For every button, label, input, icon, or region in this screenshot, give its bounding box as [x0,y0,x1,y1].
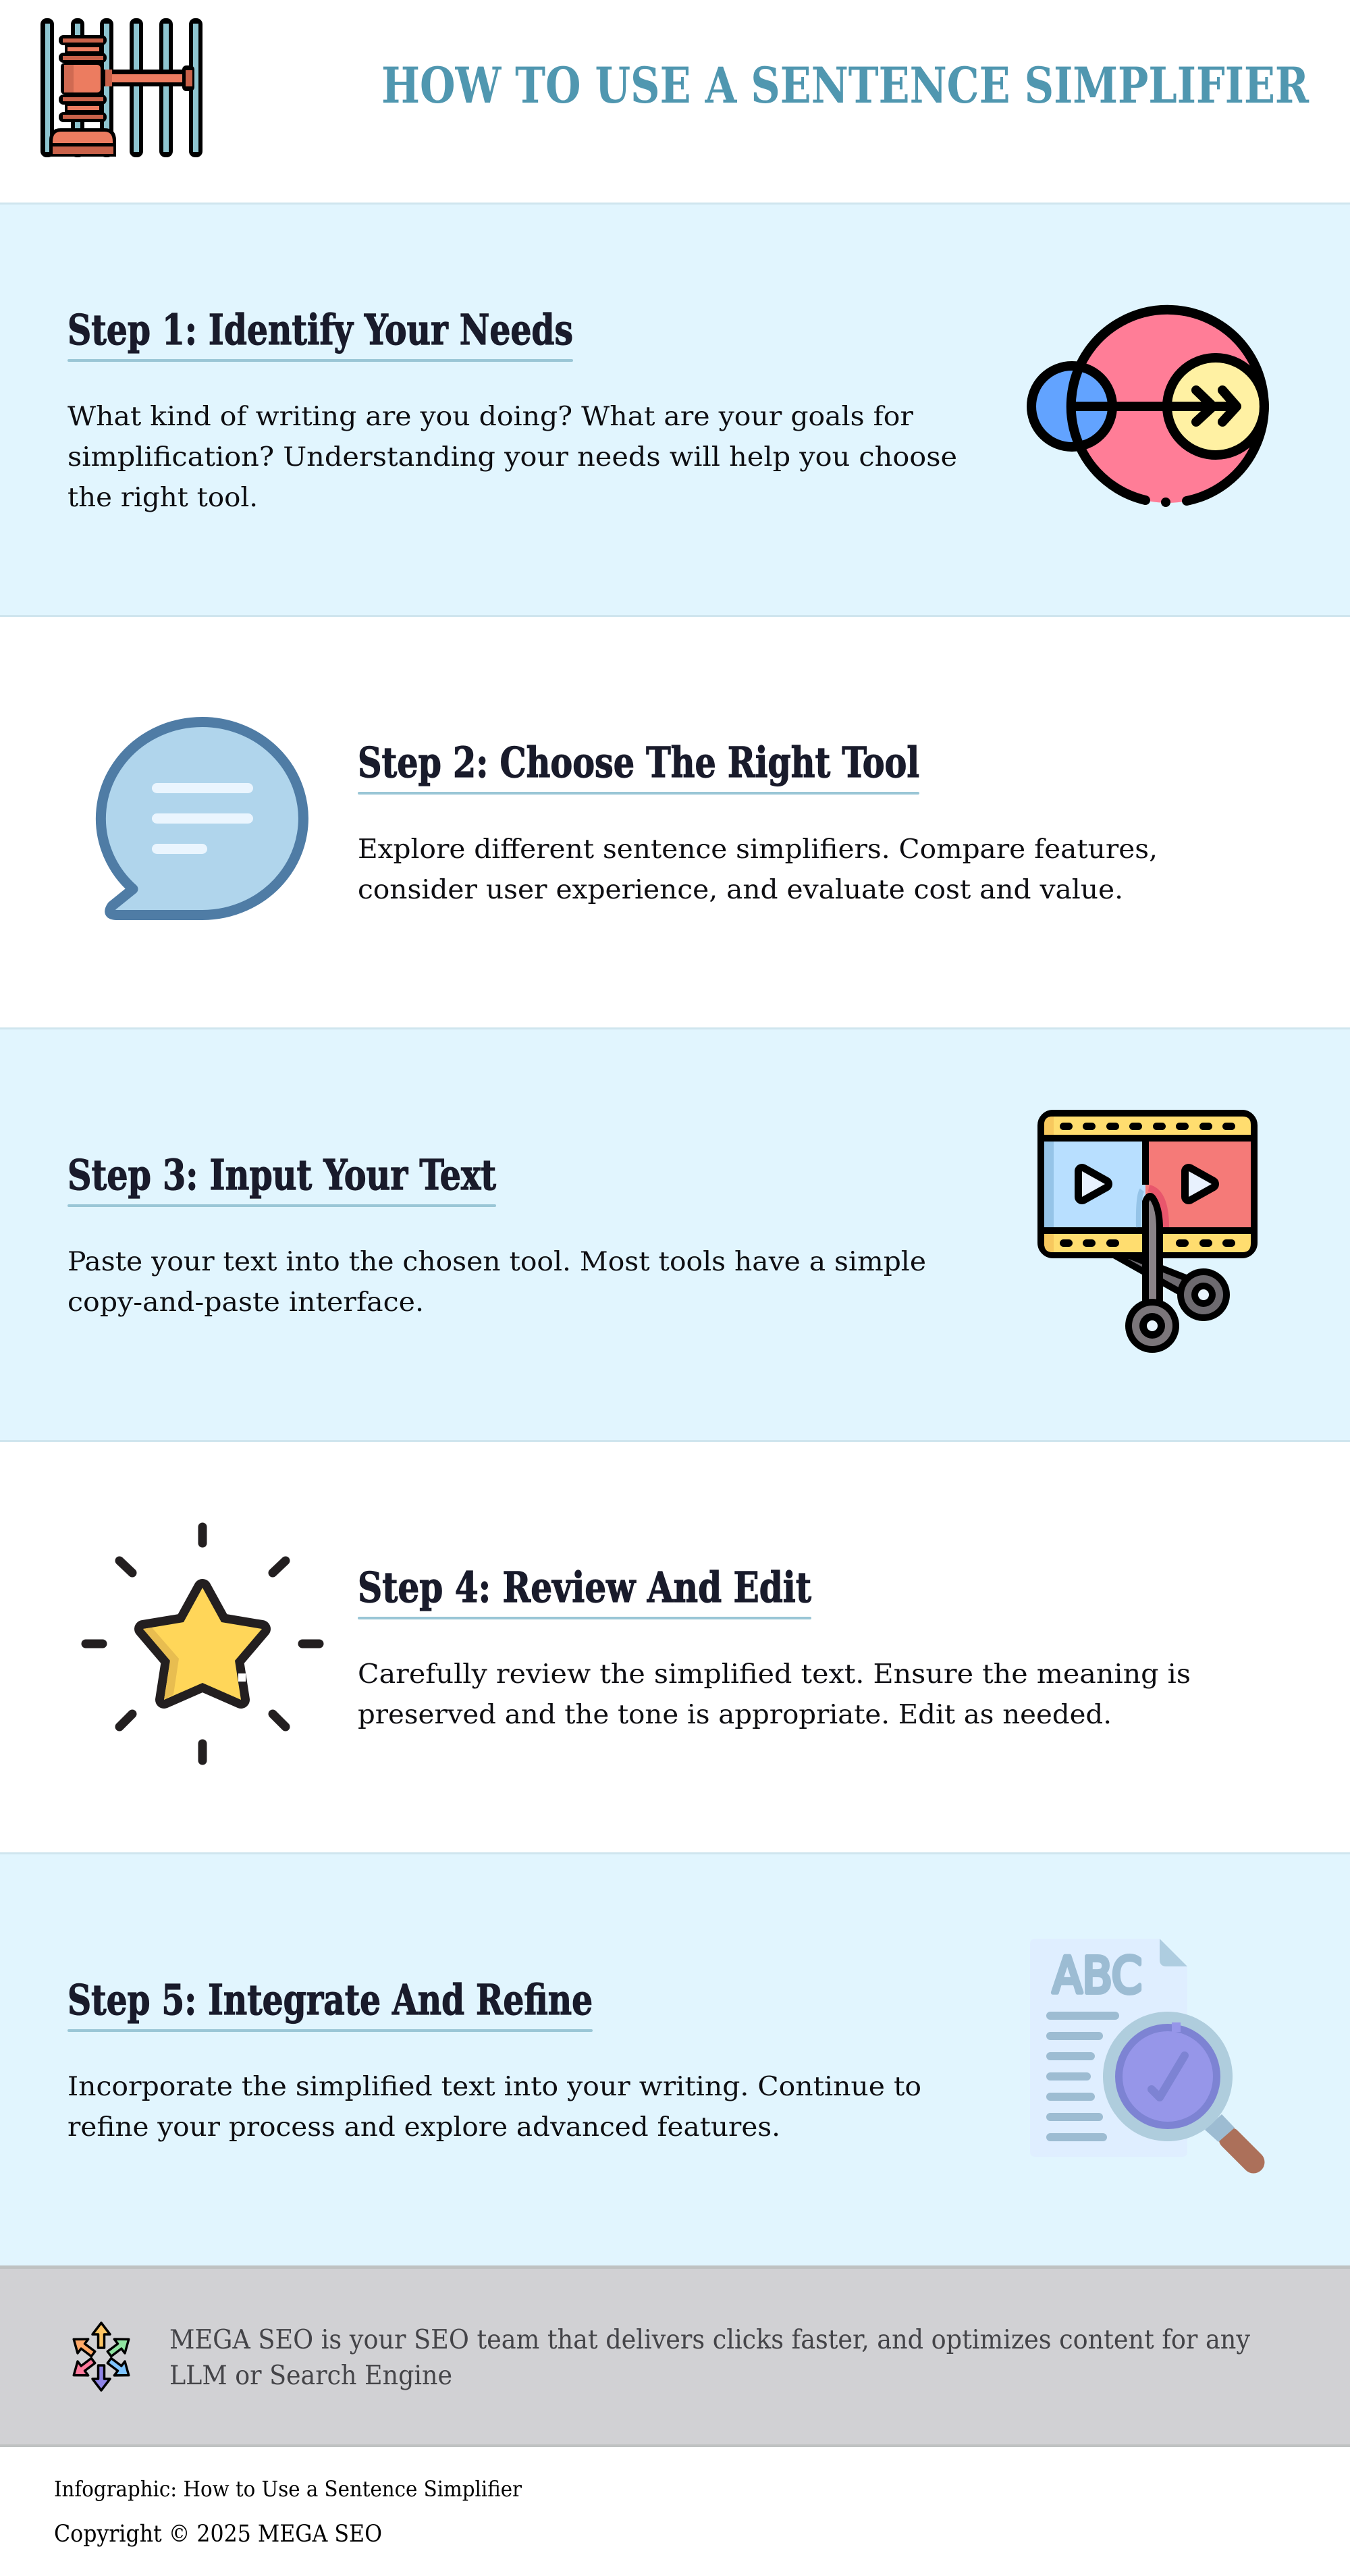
text: mega seo message: MEGA SEO is your SEO team that delivers clicks faster, and optimizes content for any [169,2325,1250,2355]
header [40,18,1309,157]
icon: document with magnifier [1030,1939,1253,2162]
text: step 4 body: preserved and the tone is appropriate. Edit as needed. [358,1700,1112,1730]
heading: step 2: Step 2: Choose The Right Tool [358,738,919,787]
panel: step 1 [0,203,1350,616]
text: step 4 body: Carefully review the simplified text. Ensure the meaning is [358,1659,1191,1690]
text: step 5 body: Incorporate the simplified text into your writing. Continue to [68,2072,921,2102]
text: step 4 body [358,1659,1191,1730]
text: step 3 body: copy-and-paste interface. [68,1287,424,1318]
footer caption: Infographic: How to Use a Sentence Simplifier [54,2476,522,2502]
panel: mega seo callout [0,2265,1350,2447]
text: step 2 body: consider user experience, and evaluate cost and value. [358,875,1123,905]
panel: step 3 [0,1027,1350,1441]
text: step 1 body: simplification? Understanding your needs will help you choose [68,442,957,473]
icon: gavel and bars [40,18,202,157]
text: step 3 body [68,1247,926,1318]
text: mega seo message: LLM or Search Engine [169,2361,452,2391]
text: step 2 body: Explore different sentence simplifiers. Compare features, [358,834,1158,865]
text: step 1 body: What kind of writing are you doing? What are your goals for [68,402,913,432]
text: step 2 body [358,834,1158,905]
heading: step 4: Step 4: Review And Edit [358,1563,811,1612]
icon: film strip and scissors [1041,1113,1254,1353]
text: step 5 body: refine your process and explore advanced features. [68,2112,780,2143]
icon: document with magnifier: ABC [1052,1947,1142,2005]
icon: star with rays [86,1527,319,1761]
copyright: Copyright © 2025 MEGA SEO [54,2521,382,2548]
panel: step 4 [0,1440,1350,1854]
panel: step 5 [0,1852,1350,2266]
text: step 1 body [68,402,957,513]
icon: six colored arrows [68,2323,134,2390]
panel: step 2 [0,615,1350,1029]
icon: speech bubble [101,722,303,915]
heading: step 3: Step 3: Input Your Text [68,1150,496,1200]
text: step 5 body [68,2072,921,2143]
text: step 1 body: the right tool. [68,483,258,513]
footer [54,2476,522,2548]
heading: step 1: Step 1: Identify Your Needs [68,305,573,354]
text: step 3 body: Paste your text into the chosen tool. Most tools have a simple [68,1247,926,1277]
heading: step 5: Step 5: Integrate And Refine [68,1975,593,2024]
icon: target circles with arrow [1031,310,1264,507]
text: mega seo message [169,2325,1250,2391]
